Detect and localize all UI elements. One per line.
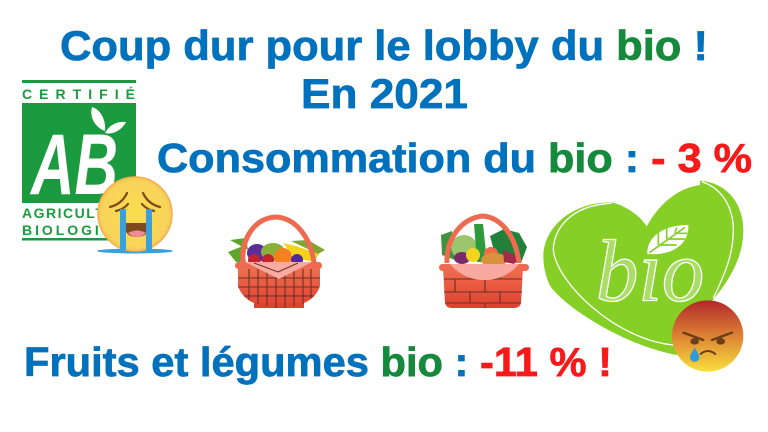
logo text: agriculture: AGRICULTURE [22, 205, 138, 221]
icon: fruit basket [228, 217, 325, 308]
icon: crying emoji [97, 177, 173, 254]
logo text: certifié: CERTIFIÉ [22, 86, 135, 102]
heading: fruits et légumes: Fruits et légumes bio : -11 % ! [24, 339, 612, 385]
title line 1: Coup dur pour le lobby du bio ! [60, 22, 708, 69]
logo word: bio: bio [596, 223, 704, 321]
logo leaf [647, 225, 688, 254]
logo text: biologique: BIOLOGIQUE [22, 222, 138, 238]
heading: consommation: Consommation du bio : - 3 % [157, 135, 752, 181]
title line 2: En 2021 [301, 70, 468, 117]
logo letters: AB: AB [30, 117, 118, 213]
logo leaves [91, 107, 126, 133]
icon: AB certified logo [22, 80, 138, 240]
icon: bio heart [543, 181, 743, 355]
icon: angry emoji with tear [672, 300, 743, 372]
icon: vegetable basket [439, 216, 529, 308]
